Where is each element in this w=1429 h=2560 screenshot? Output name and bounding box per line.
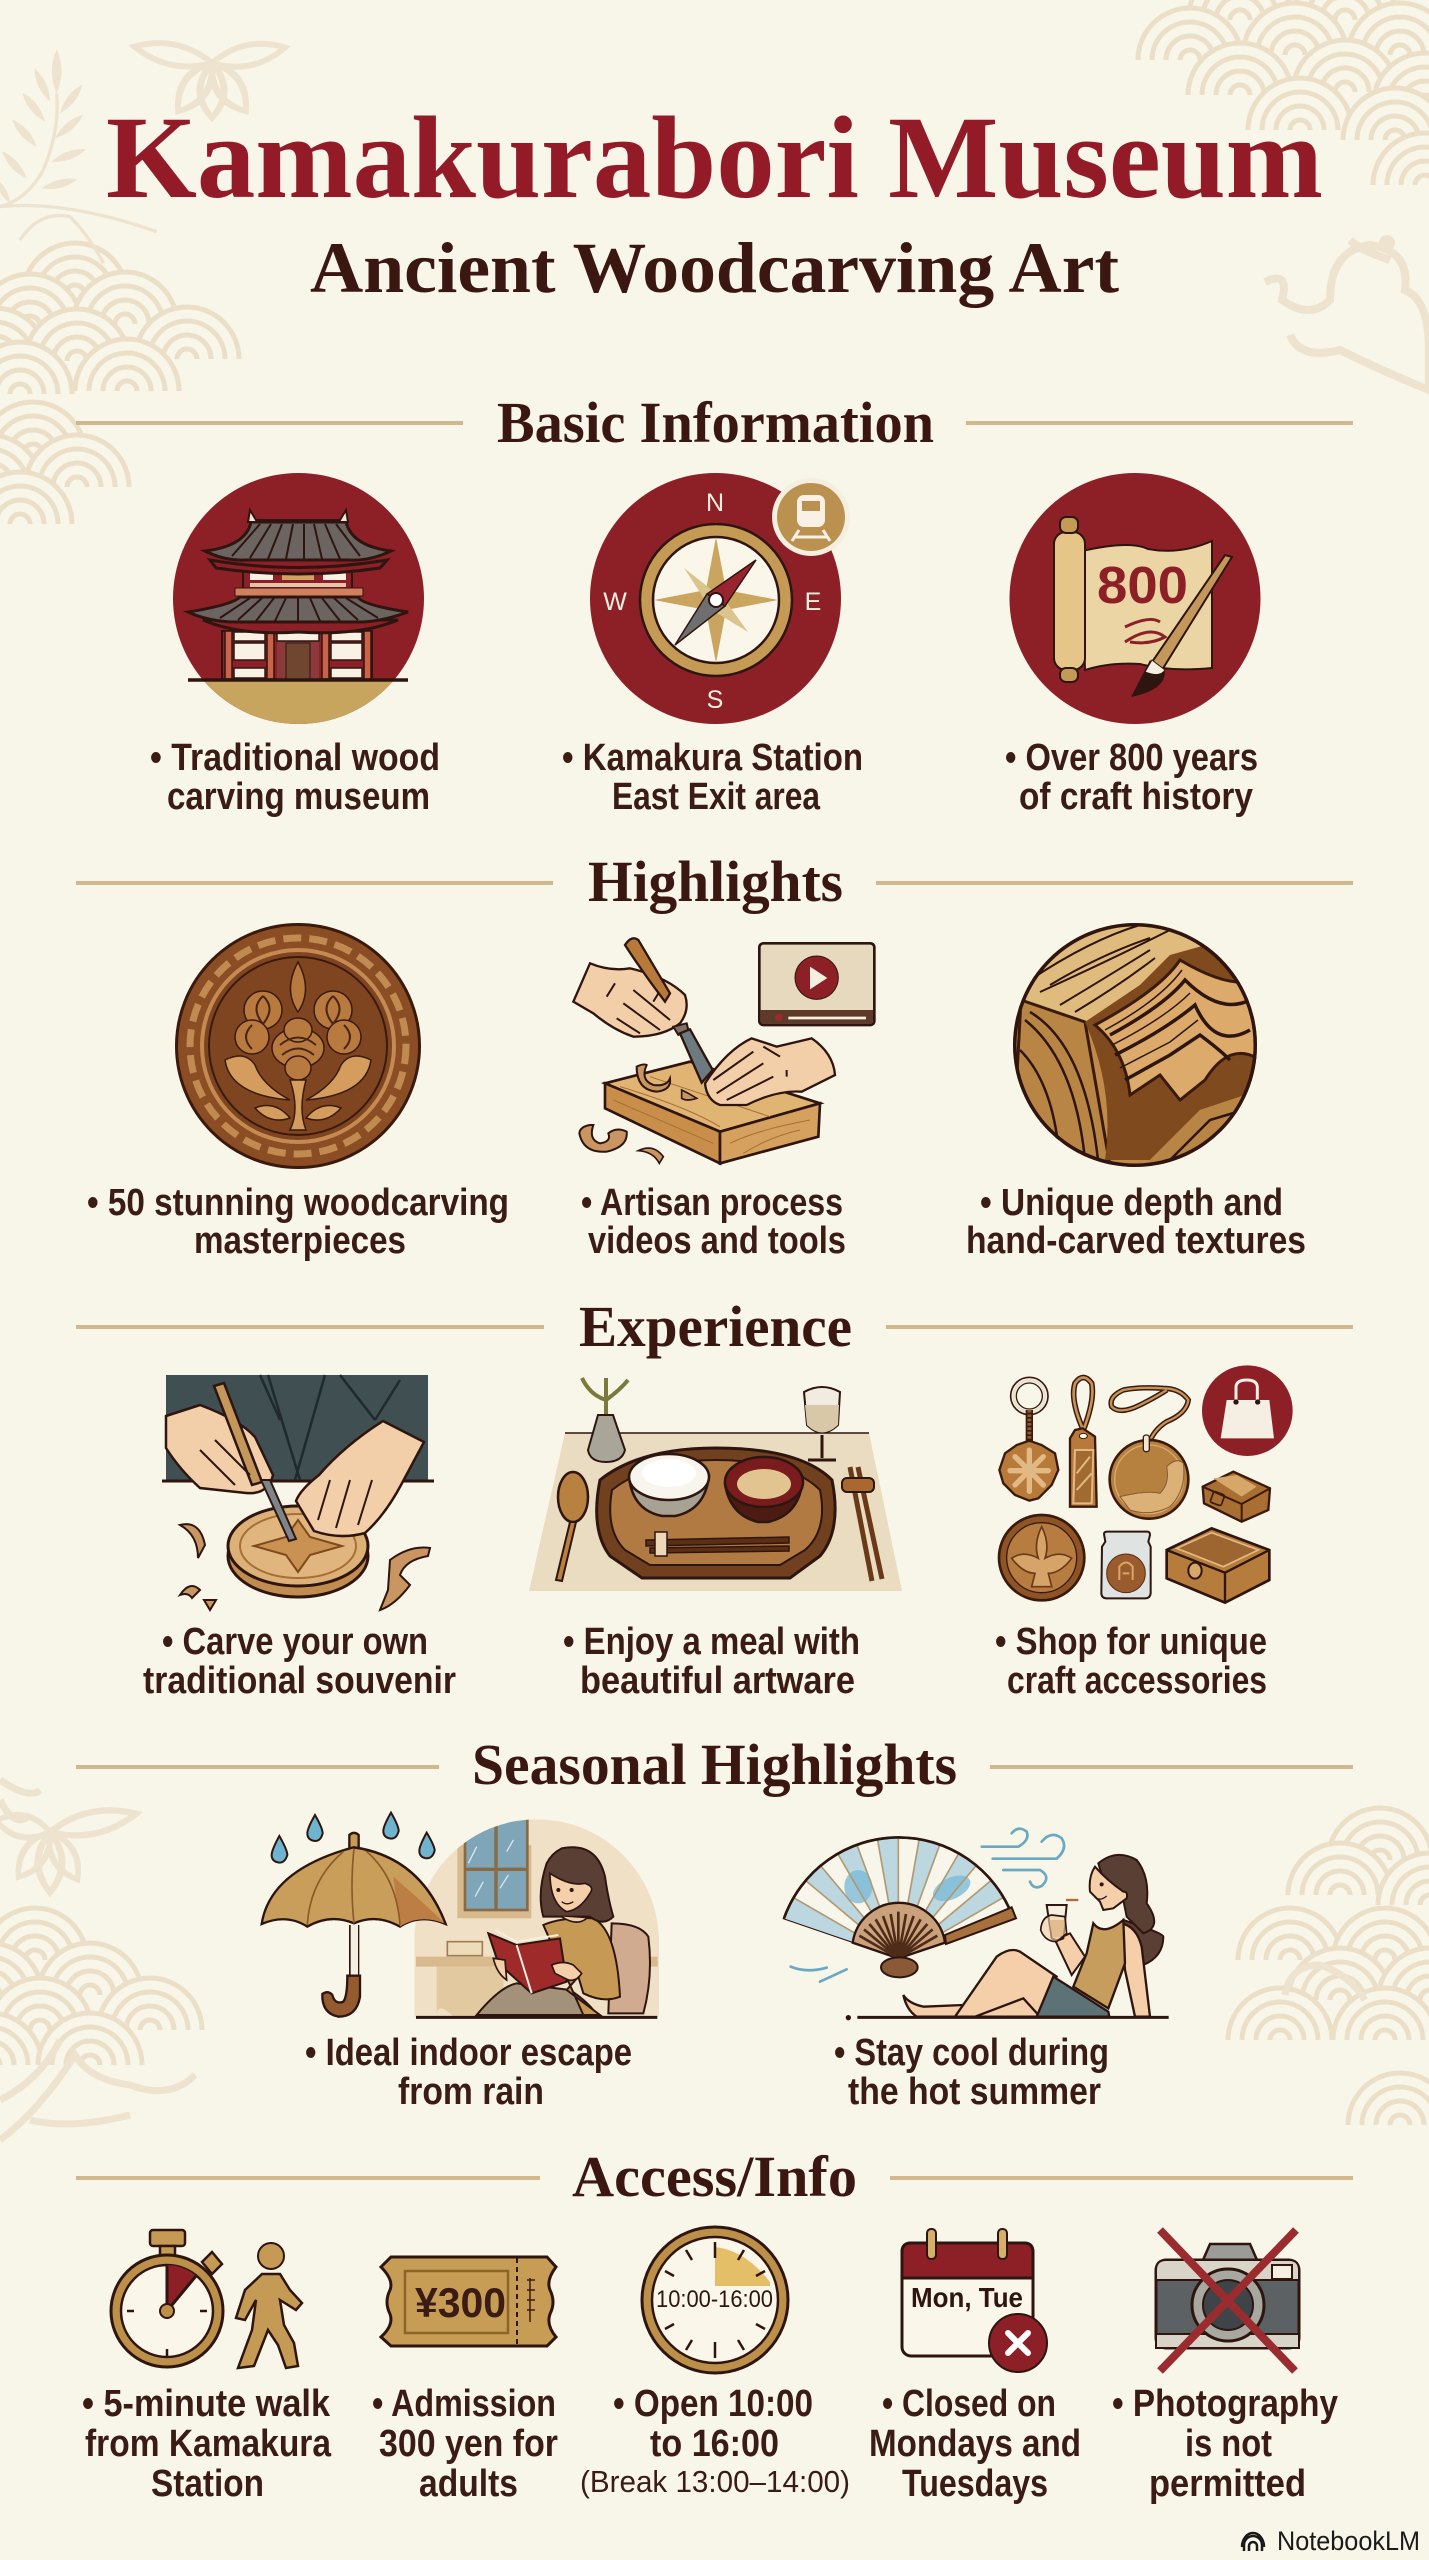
caption: the hot summer	[848, 2071, 1101, 2113]
caption	[563, 1621, 860, 1702]
heading: basic information: Basic Information	[497, 390, 934, 455]
caption	[580, 2383, 850, 2499]
caption: craft accessories	[1007, 1660, 1267, 1702]
item: no photography	[1112, 2230, 1338, 2505]
heading: highlights: Highlights	[588, 849, 843, 914]
caption	[87, 1182, 509, 1262]
icon: clock with hours	[642, 2227, 788, 2373]
icon: compass with train badge: S	[707, 686, 723, 714]
icon: compass with train badge: W	[603, 588, 627, 616]
caption: traditional souvenir	[143, 1660, 456, 1702]
panel: seasonal highlights	[76, 1732, 1353, 2113]
caption: • Admission	[372, 2383, 556, 2425]
icon: fan and woman with drink	[784, 1829, 1169, 2020]
caption: • Carve your own	[162, 1621, 428, 1663]
caption: • 50 stunning woodcarving	[87, 1182, 509, 1224]
subtitle: Ancient Woodcarving Art	[310, 228, 1119, 308]
caption: • Unique depth and	[980, 1182, 1283, 1224]
caption	[966, 1182, 1306, 1262]
caption: (Break 13:00–14:00)	[580, 2464, 850, 2499]
NotebookLM mark: NotebookLM	[1277, 2526, 1420, 2556]
item: carve souvenir	[143, 1375, 456, 1702]
caption: • 5-minute walk	[82, 2383, 331, 2425]
caption: 300 yen for	[379, 2423, 558, 2465]
icon: admission ticket	[381, 2257, 556, 2346]
icon: craft accessories	[999, 1365, 1293, 1603]
title: Kamakurabori Museum	[106, 92, 1323, 223]
caption: videos and tools	[588, 1220, 846, 1262]
panel: experience	[76, 1294, 1353, 1702]
item: summer	[784, 1829, 1169, 2113]
item: location	[562, 473, 863, 818]
caption	[1112, 2383, 1338, 2505]
item: closed days	[869, 2229, 1081, 2505]
item: museum	[150, 473, 440, 818]
heading: access info: Access/Info	[572, 2144, 857, 2209]
caption: Tuesdays	[902, 2463, 1048, 2505]
icon: meal on lacquer tray	[529, 1378, 902, 1591]
item: history	[1005, 473, 1260, 818]
caption: • Enjoy a meal with	[563, 1621, 860, 1663]
icon: clock with hours: 10:00-16:00	[656, 2286, 773, 2313]
icon: hands carving wood with video	[573, 938, 874, 1163]
icon: umbrella and reading woman	[262, 1813, 662, 2018]
caption: to 16:00	[650, 2423, 779, 2465]
icon: compass with train badge: E	[805, 588, 821, 616]
icon: compass with train badge	[590, 473, 850, 724]
caption: • Over 800 years	[1005, 737, 1258, 779]
icon: wood grain texture	[1010, 920, 1260, 1170]
caption: • Shop for unique	[995, 1621, 1267, 1663]
caption	[1005, 737, 1258, 818]
caption: • Closed on	[882, 2383, 1056, 2425]
item: meal	[529, 1378, 902, 1702]
caption: • Photography	[1112, 2383, 1338, 2425]
caption	[82, 2383, 332, 2505]
icon: calendar closed	[902, 2229, 1047, 2372]
icon: admission ticket: ¥300	[415, 2279, 506, 2326]
caption	[143, 1621, 456, 1702]
panel: highlights	[76, 849, 1353, 1262]
caption: carving museum	[167, 776, 430, 818]
caption: • Kamakura Station	[562, 737, 863, 779]
caption: • Open 10:00	[613, 2383, 813, 2425]
caption: East Exit area	[612, 776, 821, 818]
item: artisan process	[573, 938, 874, 1262]
caption	[372, 2383, 558, 2505]
caption: hand-carved textures	[966, 1220, 1306, 1262]
caption: beautiful artware	[580, 1660, 855, 1702]
icon: calendar closed: Mon, Tue	[911, 2282, 1023, 2313]
caption	[869, 2383, 1081, 2505]
icon: scroll with 800 and brush: 800	[1097, 557, 1188, 615]
caption: permitted	[1149, 2463, 1306, 2505]
icon: carved wooden disc	[176, 924, 420, 1168]
caption	[995, 1621, 1267, 1702]
caption	[834, 2032, 1109, 2113]
icon: traditional temple building	[170, 473, 430, 730]
caption: Mondays and	[869, 2423, 1081, 2465]
caption	[150, 737, 440, 818]
caption: • Stay cool during	[834, 2032, 1109, 2074]
caption: from rain	[398, 2071, 544, 2113]
item: hours	[580, 2227, 850, 2499]
item: textures	[966, 920, 1306, 1262]
caption: adults	[419, 2463, 518, 2505]
caption: from Kamakura	[85, 2423, 332, 2465]
caption: is not	[1185, 2423, 1272, 2465]
caption	[581, 1182, 846, 1262]
item: admission	[372, 2257, 558, 2505]
caption: masterpieces	[194, 1220, 406, 1262]
item: shop	[995, 1365, 1293, 1702]
item: walk	[82, 2230, 332, 2505]
icon: scroll with 800 and brush	[1010, 473, 1260, 724]
heading: seasonal highlights: Seasonal Highlights	[472, 1732, 957, 1797]
icon: stopwatch and walker	[111, 2230, 302, 2368]
panel: basic information	[76, 390, 1353, 818]
caption: • Ideal indoor escape	[305, 2032, 632, 2074]
caption: of craft history	[1019, 776, 1253, 818]
caption	[562, 737, 863, 818]
caption	[305, 2032, 632, 2113]
caption: • Traditional wood	[150, 737, 440, 779]
panel: access info	[76, 2144, 1353, 2505]
icon: carving a souvenir	[162, 1375, 434, 1610]
icon: crossed-out camera	[1156, 2230, 1299, 2371]
item: masterpieces	[87, 924, 509, 1262]
caption: • Artisan process	[581, 1182, 843, 1224]
heading: experience: Experience	[579, 1294, 852, 1359]
icon: compass with train badge: N	[706, 489, 724, 517]
caption: Station	[151, 2463, 264, 2505]
item: rain	[262, 1813, 662, 2113]
